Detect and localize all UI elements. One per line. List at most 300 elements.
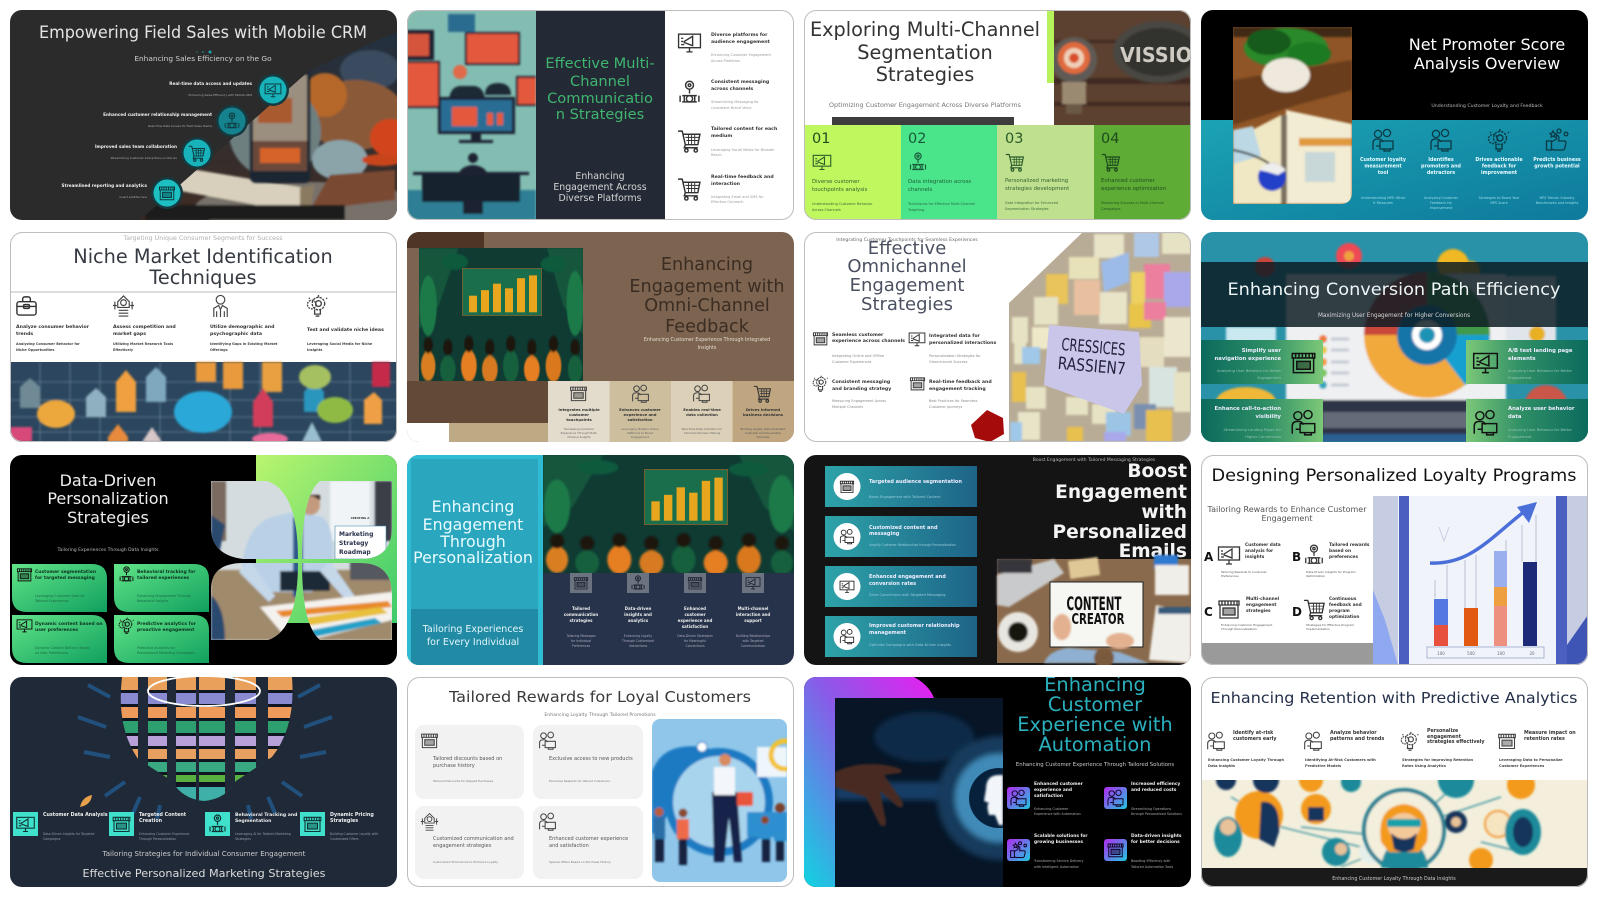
slide 2: Effective Multi-Channel Communication Strategies: [407, 10, 794, 220]
subtitle: Maximizing User Engagement for Higher Conversions: [1318, 313, 1470, 319]
column: promoters: [1421, 129, 1462, 210]
column 01: Diverse customer: [812, 179, 860, 185]
column: experience: Data-Driven Strategies: [677, 634, 713, 638]
column: satisfaction: Enhances customer: [619, 407, 661, 412]
title: Engagement: [423, 515, 523, 534]
card: content and messaging: Amplify Customer Relationships through Personalization: [869, 543, 956, 547]
card: experience: Special Offers Based on Purchase History: [549, 860, 611, 864]
column: multi-channel: interaction and: [736, 612, 770, 617]
panel: call-to-action: visibility: [1256, 414, 1282, 420]
column 01: 01: [812, 131, 830, 147]
column 04: Campaigns: [1101, 207, 1121, 211]
column: experience: [677, 573, 713, 648]
card: audience segmentation: [825, 466, 977, 507]
colour blocks: [407, 232, 548, 442]
panel: analyze behavior: Analyze user behavior: [1508, 406, 1575, 412]
teal lower band: [1201, 120, 1588, 220]
column 01: [804, 125, 901, 220]
item: efficiency: Increased efficiency: [1131, 781, 1180, 787]
title: Strategies: [861, 294, 953, 315]
panel: A/B test: Analyzing User Behavior for Better: [1508, 369, 1572, 373]
photo: colorful 3D data pieces: [10, 362, 397, 445]
centre panel: [536, 10, 665, 220]
item: targeted content: Creation: [139, 818, 163, 824]
title: Personalization: [47, 489, 169, 508]
column 03: Data Integration for Enhanced: [1005, 201, 1058, 205]
card: discounts: Tailored discounts based on: [432, 756, 502, 762]
column: consumer behavior: Niche Opportunities: [16, 348, 54, 352]
card: predictive analytics: Predictive Analytics for: [137, 646, 175, 650]
column: insights: Data-driven: [625, 606, 651, 611]
item: data-driven: [1104, 833, 1182, 869]
subtitle: Tailoring Strategies for Individual Consumer Engagement: [102, 849, 306, 858]
item B: Optimization: [1306, 574, 1325, 578]
item: real-time data: Enhancing Sales Efficiency with Mobile CRM: [188, 93, 252, 97]
item: targeted content: Targeted Content: [139, 812, 187, 818]
title: Strategies: [876, 63, 974, 86]
card: customer segmentation: [12, 564, 107, 612]
subtitle: Enhancing: [575, 171, 625, 182]
item A: [1204, 542, 1281, 578]
item: consistent messaging: Streamlining Messaging for: [711, 100, 759, 104]
title: n Strategies: [556, 106, 644, 123]
item: behavioral tracking: Segmentation: [235, 818, 271, 824]
item D: optimization: [1329, 614, 1359, 620]
panel: analyze behavior: Engagement: [1508, 435, 1532, 439]
item: enhanced experience: [1007, 781, 1084, 816]
column: touchpoints: touchpoints: [566, 417, 592, 422]
column 02: Data integration across: [908, 179, 971, 185]
title: Analysis Overview: [1414, 54, 1560, 73]
panel: call-to-action: Higher Conversions: [1245, 435, 1281, 439]
subtitle: Enhancing Sales Efficiency on the Go: [134, 54, 272, 63]
card: experience: and satisfaction: [549, 843, 589, 849]
title: Through: [439, 532, 506, 551]
panel: call-to-action: [1201, 399, 1323, 442]
card: dynamic content: [12, 615, 107, 663]
item C: strategies: [1246, 608, 1271, 614]
column: behavior patterns: patterns and trends: [1330, 736, 1384, 742]
title: Experience with: [1017, 713, 1173, 736]
subtitle: Tailoring Experiences Through Data Insights: [56, 547, 159, 553]
column: behavior patterns: Predictive Models: [1305, 764, 1341, 768]
column: insights: analytics: [628, 618, 649, 623]
column: promoters: Improvement: [1430, 206, 1453, 210]
photo: four-petal crop of strategist at table: CREATING A: [351, 516, 370, 520]
column 04: experience optimization: [1101, 186, 1166, 192]
title: Personalization: [413, 548, 533, 567]
item: consistent messaging: across channels: [711, 86, 753, 92]
photo: four-petal crop of strategist at table: Roadmap: [339, 549, 371, 556]
column: experience: Enhanced: [684, 606, 706, 611]
column: satisfaction: satisfaction: [627, 417, 653, 422]
title: Exploring Multi-Channel: [810, 18, 1040, 41]
column: decisions: Channels: [757, 435, 770, 439]
column: demographics: psychographic data: [210, 331, 262, 337]
column 04: Enhanced customer: [1101, 178, 1156, 184]
item: real-time tracking: Best Practices for Seamless: [929, 399, 978, 403]
item: diverse platforms: Diverse platforms for: [711, 32, 768, 38]
item: real-time tracking: Customer Journeys: [929, 405, 962, 409]
card: engagement and conversion: conversion rates: [869, 581, 916, 587]
column: growth: Benchmarks and Insights: [1536, 201, 1579, 205]
column: insights: Through Customized: [621, 639, 654, 643]
item: scalable: Transforming Service Delivery: [1033, 859, 1084, 863]
item: data-driven: for better decisions: [1131, 839, 1180, 845]
slide 1: Empowering Field Sales with Mobile CRM: [10, 10, 397, 220]
column: communication: [564, 573, 598, 648]
subtitle: Targeting Unique Consumer Segments for Success: [122, 235, 283, 242]
title: Designing Personalized Loyalty Programs: [1212, 466, 1576, 485]
column 03: 03: [1005, 131, 1023, 147]
dark title band: [1201, 262, 1588, 327]
title: Boost: [1127, 461, 1187, 482]
column: competition: Effectively: [113, 348, 134, 352]
column: loyalty: measurement: [1364, 164, 1402, 170]
card: customer segmentation: Tailored Experiences: [34, 599, 69, 603]
column: consumer behavior: Analyzing Consumer Behavior for: [16, 342, 80, 346]
item: efficiency: through Personalized Solutions: [1131, 812, 1182, 816]
subtitle: Enhancing Customer Experience Through Integrated: [644, 337, 770, 343]
title: Automation: [1039, 733, 1151, 756]
column: measure impact: Customer Experiences: [1499, 764, 1544, 768]
item: data-driven: Boosting Efficiency with: [1131, 859, 1170, 863]
item: targeted content: [109, 812, 190, 841]
column: personalize: engagement: [1427, 734, 1462, 740]
column: communication: Tailoring Messages: [565, 634, 596, 638]
slide 10: Enhancing Engagement Through Personalization: [407, 455, 795, 665]
item D: D: [1292, 605, 1302, 619]
item: integrated data: Omnichannel Success: [929, 360, 968, 364]
item: behavioral tracking: Behavioral Tracking and: [235, 812, 297, 818]
column: communication: strategies: [570, 618, 593, 623]
column: loyalty: Understanding NPS: What: [1361, 196, 1406, 200]
column: personalize: Rates Using Analytics: [1402, 764, 1446, 768]
item C: Through Personalization: [1220, 627, 1257, 631]
item: seamless experience: Integrating Online and Offline: [832, 354, 884, 358]
card: exclusive access: Exclusive Rewards for Valued Customers: [549, 779, 610, 783]
item: diverse platforms: audience engagement: [711, 39, 771, 45]
item: real-time feedback: interaction: [711, 181, 740, 187]
title: Customer: [1048, 693, 1142, 716]
item: customer relationship: Real-Time Data Access for Field Sales Teams: [148, 124, 212, 128]
column: touchpoints: [548, 381, 610, 442]
card: content and messaging: Customized content and: [869, 525, 938, 531]
item: efficiency: [1104, 781, 1182, 816]
column: data collection: Informed Decision-Making: [684, 431, 720, 435]
item: real-time feedback: Effective Outreach: [711, 200, 744, 204]
column: loyalty: It Measures: [1373, 201, 1393, 205]
card: audience segmentation: Targeted audience segmentation: [869, 479, 962, 485]
item: customer relationship: Enhanced customer relationship management: [103, 112, 212, 117]
item: dynamic pricing: Building Customer Loyalty with: [330, 832, 378, 836]
item A: A: [1204, 550, 1214, 564]
card: engagement and conversion: Drive Conversions with Targeted Messaging: [869, 593, 945, 597]
card: relationship management: Improved customer relationship: [869, 623, 960, 629]
pagination dots: [196, 50, 212, 54]
item: real-time tracking: engagement tracking: [929, 386, 986, 392]
column: multi-channel: Communication: [741, 644, 765, 648]
item: integrated data: Integrated data for: [929, 333, 981, 339]
column: personalize: [1401, 728, 1485, 768]
item C: Enhancing Customer Engagement: [1221, 623, 1273, 627]
column: feedback: [1475, 129, 1523, 205]
footer band: Enhancing Customer Loyalty Through Data Insights: [1332, 876, 1456, 882]
title: Enhancing: [432, 497, 514, 516]
illustration: network of customer avatars: [1201, 762, 1588, 872]
panel: A/B test: Engagement: [1508, 376, 1532, 380]
column: experience: for Meaningful: [684, 639, 706, 643]
title: Tailored Rewards for Loyal Customers: [448, 688, 751, 706]
item D: [1292, 596, 1362, 631]
photo: light bulb and vision sign: VISSIO: [1120, 43, 1192, 67]
column: validate: Insights: [307, 348, 322, 352]
card: discounts: Tailored Discounts for Repeat Purchases: [432, 779, 493, 783]
note: large lavender sheet: RASSIEN7: [1057, 354, 1126, 380]
card: content and messaging: messaging: [869, 531, 900, 537]
item: tailored content: Leveraging Social Media for Broader: [711, 148, 775, 152]
column: measure impact: Leveraging Data to Personalize: [1499, 758, 1563, 762]
column: touchpoints: Experience Through Multi-: [561, 431, 597, 435]
item: enhanced experience: satisfaction: [1034, 793, 1063, 799]
title: Effective: [868, 238, 946, 259]
title: Emails: [1119, 541, 1187, 562]
column: feedback: feedback for: [1482, 164, 1517, 170]
chart: stacked bars with growth arrow: 20: [1529, 651, 1535, 656]
column 02: Techniques for Effective Multi-Channel: [907, 202, 975, 206]
item: consistent branding: [813, 376, 891, 409]
column: experience: satisfaction: [682, 624, 708, 629]
column: growth: growth potential: [1534, 164, 1580, 170]
card: dynamic content: Dynamic content based on: [35, 621, 103, 627]
column: decisions: Drives informed: [746, 407, 780, 412]
photo: wall of sticky notes: [1009, 232, 1191, 442]
column 03: strategies development: [1005, 186, 1069, 192]
subtitle: Integrating Customer Touchpoints for Seamless Experiences: [836, 237, 978, 243]
item: real-time feedback: Real-time feedback and: [711, 174, 774, 180]
title: Strategies: [67, 508, 149, 527]
item: consistent branding: Multiple Channels: [832, 405, 863, 409]
item B: based on: [1329, 548, 1351, 554]
title: Enhancing: [661, 255, 753, 275]
column: feedback: Strategies to Boost Your: [1479, 196, 1520, 200]
item: reporting: Insert subtitle here: [120, 195, 147, 199]
item: enhanced experience: experience and: [1034, 787, 1072, 793]
slide 9: Data-Driven Personalization Strategies: [10, 455, 397, 665]
subtitle: Enhancing Customer Experience Through Tailored Solutions: [1016, 762, 1174, 768]
card: predictive analytics: [114, 615, 209, 663]
panel: A/B test: [1466, 340, 1588, 384]
illustration: striped funnel: [78, 676, 332, 819]
item: targeted content: Enhancing Customer Experience: [139, 832, 190, 836]
column: data collection: [671, 381, 732, 442]
column: decisions: [732, 381, 794, 442]
card: behavioral tracking: tailored experiences: [137, 575, 189, 581]
card: dynamic content: on User Preferences: [35, 651, 68, 655]
footer band: [1201, 868, 1588, 887]
column: touchpoints: customer: [569, 412, 589, 417]
slide 16: Enhancing Retention with Predictive Analytics: [1201, 677, 1588, 887]
card: exclusive access: Exclusive access to new products: [549, 756, 633, 762]
subtitle: Engagement Across: [553, 182, 647, 193]
card: discounts: purchase history: [433, 763, 475, 769]
subtitle: Insights: [698, 345, 717, 351]
item: real-time data: [169, 74, 289, 106]
card: relationship management: management: [869, 630, 907, 636]
column: decisions: business decisions: [743, 412, 784, 417]
item D: feedback and: [1329, 602, 1362, 608]
slide 11: Boost Engagement with Personalized Emails: [804, 455, 1191, 668]
item: scalable: growing businesses: [1034, 839, 1083, 845]
item: diverse platforms: Across Platforms: [711, 59, 740, 63]
column: measure impact: Measure impact on: [1524, 730, 1576, 736]
item: behavioral tracking: [205, 812, 297, 841]
column: feedback: Drives actionable: [1475, 157, 1523, 163]
item: tailored content: Tailored content for each: [711, 126, 777, 132]
photo: content creator notebook on desk: [997, 555, 1191, 668]
illustration: people and customer dashboard: [652, 719, 799, 882]
item: real-time tracking: [910, 378, 992, 409]
subtitle: Understanding Customer Loyalty and Feedback: [1431, 103, 1543, 109]
chart: stacked bars with growth arrow: 100: [1497, 651, 1505, 656]
slide 3: Exploring Multi-Channel Segmentation Strategies: [804, 10, 1205, 220]
subtitle: Tailoring Experiences: [422, 624, 523, 635]
column: loyalty: tool: [1378, 170, 1389, 176]
column: data collection: Real-Time Data Collection for: [682, 427, 723, 431]
card: relationship management: Optimize Campaigns with Data-Driven Insights: [869, 643, 951, 647]
column: consumer behavior: trends: [16, 331, 33, 337]
title: Enhancing: [1044, 673, 1146, 696]
panel: simplify navigation: navigation experience: [1214, 356, 1281, 362]
column: communication: Preferences: [572, 644, 590, 648]
item: reporting: Streamlined reporting and analytics: [62, 183, 148, 188]
column: at-risk: Data Insights: [1208, 764, 1235, 768]
title: Engagement: [850, 275, 964, 296]
item: integrated data: [909, 333, 996, 364]
column: satisfaction: experience and: [624, 412, 657, 417]
column: demographics: [210, 295, 278, 352]
title: Personalized: [1052, 522, 1187, 543]
item B: B: [1292, 550, 1301, 564]
item: customer data analysis: Customer Data Analysis: [43, 812, 108, 818]
panel: call-to-action: Enhance call-to-action: [1215, 406, 1281, 412]
item: real-time feedback: Integrating Email and SMS for: [711, 195, 764, 199]
column: consumer behavior: [16, 297, 90, 352]
title: Niche Market Identification: [73, 245, 333, 268]
column: insights: [621, 573, 654, 648]
card: content and messaging: [825, 516, 977, 557]
title: Feedback: [665, 317, 750, 337]
card: exclusive access: [533, 725, 643, 799]
note: large lavender sheet: [1044, 325, 1142, 414]
item B: preferences: [1329, 554, 1358, 560]
dark bar: [832, 117, 1014, 125]
item: customer data analysis: Data-Driven Insights for Targeted: [43, 832, 94, 836]
column: growth: NPS Trends: Industry: [1539, 196, 1575, 200]
item D: Implementation: [1306, 627, 1330, 631]
column: communication: communication: [564, 612, 598, 617]
item: seamless experience: [813, 332, 905, 364]
item: efficiency: and reduced costs: [1131, 787, 1177, 793]
title: Enhancing Conversion Path Efficiency: [1228, 279, 1561, 299]
column: multi-channel: support: [744, 618, 762, 623]
title: Techniques: [148, 266, 257, 289]
column: communication: Tailored: [572, 606, 590, 611]
column: personalize: Strategies for Improving Retention: [1402, 758, 1474, 762]
title: Engagement with: [629, 277, 785, 297]
slide 5: Niche Market Identification Techniques: [10, 232, 397, 445]
item: consistent messaging: Consistent Brand Voice: [711, 106, 752, 110]
item: customer relationship: [103, 105, 248, 137]
column: promoters: detractors: [1427, 170, 1455, 176]
subtitle: Enhancing Loyalty Through Tailored Promotions: [544, 712, 656, 718]
item: reporting: [62, 177, 183, 209]
card: customer segmentation: for targeted messaging: [35, 575, 95, 581]
item C: C: [1204, 605, 1213, 619]
column: data collection: Enables real-time: [683, 407, 721, 412]
item: tailored content: medium: [711, 133, 732, 139]
item D: Strategies for Effective Program: [1306, 623, 1354, 627]
column: loyalty: [1360, 129, 1407, 205]
card: communication: [415, 806, 524, 879]
photo: content creator notebook on desk: CONTENT: [1066, 593, 1122, 615]
column: loyalty: Customer loyalty: [1360, 157, 1407, 163]
item: consistent branding: and branding strategy: [832, 386, 891, 392]
red hexagon: [971, 410, 1004, 442]
item: targeted content: Through Personalization: [138, 837, 176, 841]
card: communication: engagement strategies: [433, 843, 492, 849]
photo: four-petal crop of strategist at table: [211, 481, 392, 640]
column 01: Across Channels: [812, 208, 841, 212]
panel: simplify navigation: Engagement: [1257, 376, 1282, 380]
card: behavioral tracking: Enhancing Engagement Through: [137, 594, 191, 598]
item B: Tailored rewards: [1329, 542, 1370, 548]
item: behavioral tracking: Strategies: [235, 837, 251, 841]
slide 14: Tailored Rewards for Loyal Customers: [407, 677, 799, 887]
item: enhanced experience: Enhancing Customer: [1034, 807, 1069, 811]
item: scalable: with Intelligent Automation: [1034, 865, 1079, 869]
item: tailored content: Reach: [711, 153, 722, 157]
item C: engagement: [1246, 602, 1276, 608]
column: measure impact: [1499, 730, 1576, 768]
column 04: 04: [1101, 131, 1119, 147]
item D: Continuous: [1329, 596, 1357, 602]
title: Channel: [570, 73, 630, 90]
left teal panel: [407, 455, 543, 665]
slide 8: Enhancing Conversion Path Efficiency: [1201, 232, 1588, 442]
slide 12: Designing Personalized Loyalty Programs: [1201, 455, 1588, 665]
item: diverse platforms: Enhancing Customer Engagement: [711, 53, 772, 57]
card: dynamic content: user preferences: [35, 627, 78, 633]
column: satisfaction: Leveraging Multiple Online: [621, 427, 659, 431]
illustration: laptop with donut chart: [1216, 243, 1568, 442]
slide 6: Enhancing Engagement with Omni-Channel Feedback: [407, 232, 794, 442]
column: validate: [307, 295, 384, 352]
column: validate: Test and validate niche ideas: [307, 327, 384, 333]
column: insights: Enhancing Loyalty: [624, 634, 652, 638]
item: team collaboration: [95, 137, 213, 169]
slide 13: Effective Personalized Marketing Strategies: [10, 676, 397, 887]
card: customer segmentation: Leveraging Customer Data for: [35, 594, 86, 598]
panel: simplify navigation: Analyzing User Behavior for Better: [1217, 369, 1281, 373]
item: consistent messaging: [680, 79, 769, 110]
card: discounts: [415, 725, 524, 799]
column: multi-channel: with Targeted: [742, 639, 764, 643]
chart: stacked bars with growth arrow: [1373, 496, 1588, 665]
column: multi-channel: Building Relationships: [736, 634, 770, 638]
column 03: [997, 125, 1094, 220]
column: touchpoints: Channel Insights: [567, 435, 591, 439]
